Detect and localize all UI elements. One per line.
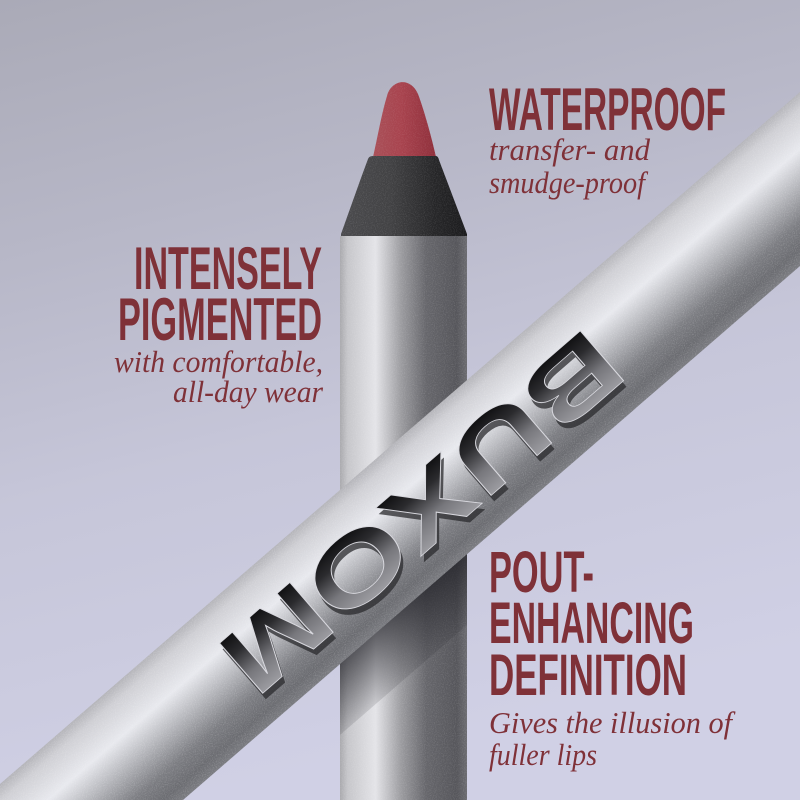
heading: intensely pigmented: INTENSELY: [134, 235, 322, 302]
heading: pout-enhancing definition: POUT-: [489, 540, 594, 605]
subtext: comfortable wear: [114, 344, 324, 409]
feature: intensely pigmented: [114, 235, 324, 409]
heading: pout-enhancing definition: [489, 540, 694, 708]
logo: BUXOM embossed: BUXOM: [202, 315, 646, 720]
pencil tip: red lip colour: [373, 82, 436, 157]
heading: intensely pigmented: [118, 235, 322, 353]
subtext: comfortable wear: all-day wear: [173, 374, 324, 409]
logo: BUXOM embossed: BUXOM: [199, 309, 643, 714]
subtext: illusion of fuller lips: Gives the illusion of: [489, 705, 736, 740]
subtext: illusion of fuller lips: [489, 705, 736, 772]
subtext: transfer and smudge proof: transfer- and: [489, 132, 650, 167]
heading: intensely pigmented: PIGMENTED: [118, 286, 322, 353]
subtext: illusion of fuller lips: fuller lips: [489, 737, 597, 772]
feature: waterproof: [489, 76, 726, 200]
subtext: comfortable wear: with comfortable,: [114, 344, 323, 379]
vertical pencil: [340, 82, 467, 800]
subtext: transfer and smudge proof: smudge-proof: [489, 165, 649, 200]
pencil cap: black collar: [341, 156, 467, 238]
feature: pout-enhancing definition: [489, 540, 736, 772]
pencil barrel: silver: [340, 236, 467, 800]
logo: BUXOM embossed: [199, 309, 646, 720]
subtext: transfer and smudge proof: [489, 132, 650, 200]
